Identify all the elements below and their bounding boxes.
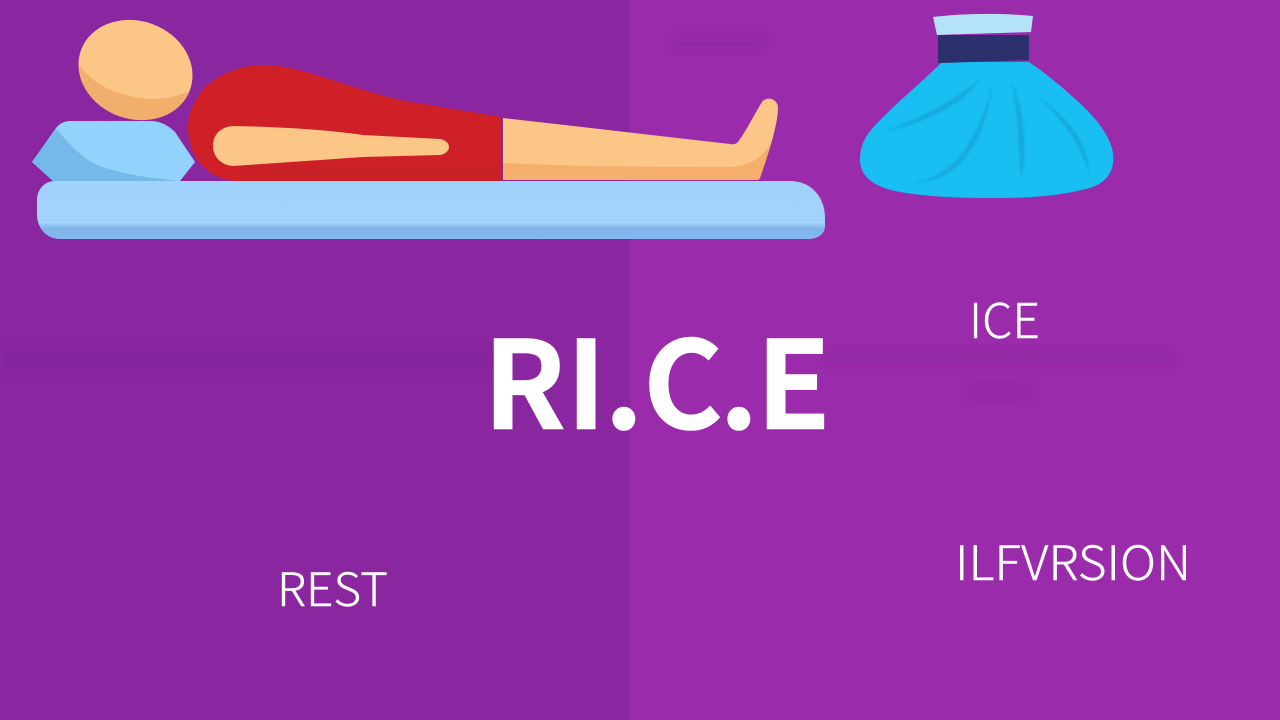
panel: right background [630,0,1280,720]
icon: person resting on mattress [32,4,825,239]
label: ice: ICE [969,282,1040,352]
mattress [37,181,825,239]
title: RI.C.E [483,288,831,465]
arm [213,126,449,166]
torso [188,65,501,181]
label: elevation: ILFVRSION [955,525,1191,594]
head shade [78,64,190,120]
pillow fold [32,129,178,181]
pillow [32,121,195,181]
bag neck [938,35,1029,63]
bag cap [933,14,1033,35]
label: rest: REST [277,554,388,620]
shorts lower shade [240,165,501,181]
leg shade [503,143,771,180]
bag folds [883,78,1090,182]
icon: ice bag [860,14,1113,198]
head [64,4,207,136]
panel: left background [0,0,630,720]
leg [503,99,778,180]
bag body [860,62,1113,198]
